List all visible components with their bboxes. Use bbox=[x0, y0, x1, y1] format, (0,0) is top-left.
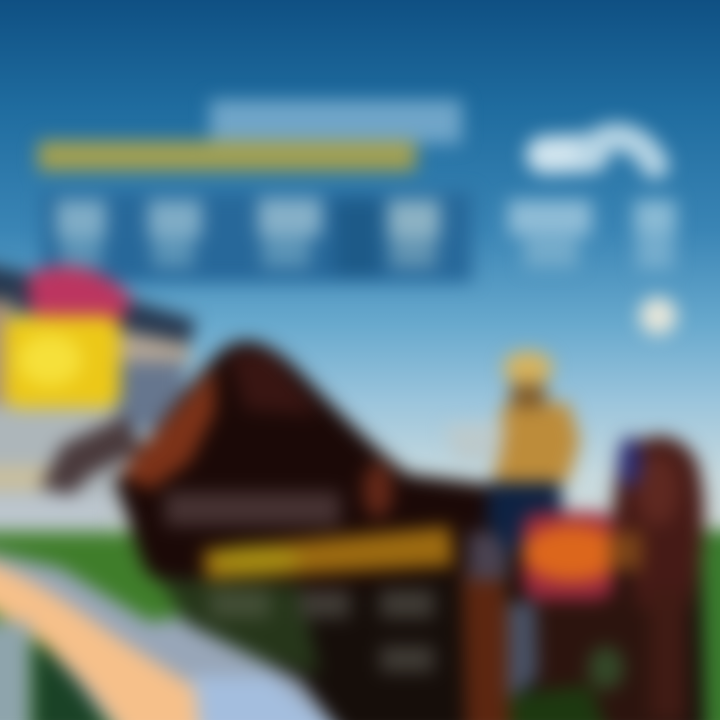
mid green patch bbox=[588, 646, 624, 690]
building wall bbox=[0, 405, 115, 530]
rider shirt bbox=[494, 402, 580, 482]
lower green patch bbox=[510, 685, 610, 720]
window bbox=[116, 362, 184, 428]
blue road lower bbox=[190, 676, 345, 720]
rider bbox=[444, 351, 580, 556]
horse maroon blanket bbox=[165, 492, 340, 526]
right lower body bbox=[535, 585, 690, 720]
dark green patch bbox=[160, 578, 320, 675]
peach wall edge bbox=[0, 300, 14, 405]
rider face bbox=[510, 384, 546, 408]
blue grey trousers bbox=[508, 602, 546, 700]
head sheen bbox=[636, 454, 680, 526]
beige wall stripe bbox=[0, 466, 60, 490]
pale road bbox=[0, 548, 365, 720]
panel: stats table bbox=[42, 192, 472, 282]
small white circle icon bbox=[639, 297, 677, 335]
column 3 values bbox=[258, 198, 322, 268]
horse chestnut highlight bbox=[120, 366, 215, 490]
blue blinker bbox=[618, 436, 642, 488]
horse neck and head bbox=[114, 341, 505, 605]
dark grass lower left bbox=[34, 640, 110, 720]
orange tail bbox=[610, 532, 642, 570]
fence post bbox=[0, 622, 30, 720]
second horse head bbox=[610, 436, 704, 720]
white wall base bbox=[0, 495, 110, 527]
rider arm bbox=[444, 422, 505, 462]
column 4 values bbox=[388, 200, 440, 268]
dark roof bbox=[0, 260, 196, 344]
horse head right bbox=[610, 436, 704, 610]
panel background bbox=[42, 192, 472, 282]
peach path bbox=[0, 555, 200, 720]
sign highlight bbox=[18, 334, 82, 386]
upper beige fascia bbox=[112, 330, 190, 366]
grass bbox=[0, 530, 720, 720]
panel dark gap bbox=[335, 200, 381, 275]
red awning bbox=[28, 266, 132, 324]
rider jeans bbox=[486, 476, 564, 556]
rider hat bbox=[503, 351, 553, 385]
horse: large left bbox=[114, 341, 505, 605]
horse: red-brown leg bbox=[462, 572, 512, 720]
highlighted subtitle bar bbox=[38, 141, 416, 171]
grey saddle cloth bbox=[468, 532, 508, 580]
horse neck sheen bbox=[228, 352, 320, 415]
yellow banner bbox=[203, 526, 454, 580]
lower horse leg bbox=[650, 590, 688, 720]
red surround bbox=[522, 512, 614, 600]
orange centre bbox=[522, 525, 622, 581]
heading bbox=[210, 100, 462, 144]
side stats bbox=[508, 200, 676, 270]
dark muzzle bbox=[40, 415, 145, 495]
lower dark base bbox=[170, 510, 705, 720]
column 2 values bbox=[148, 200, 202, 268]
orange patch bbox=[522, 512, 642, 600]
yellow sign bbox=[4, 316, 120, 408]
arc logo bbox=[545, 137, 655, 165]
rein tuft bbox=[363, 462, 393, 518]
column 1 values bbox=[56, 200, 106, 268]
building bbox=[0, 260, 196, 530]
harness rows bbox=[210, 590, 434, 672]
